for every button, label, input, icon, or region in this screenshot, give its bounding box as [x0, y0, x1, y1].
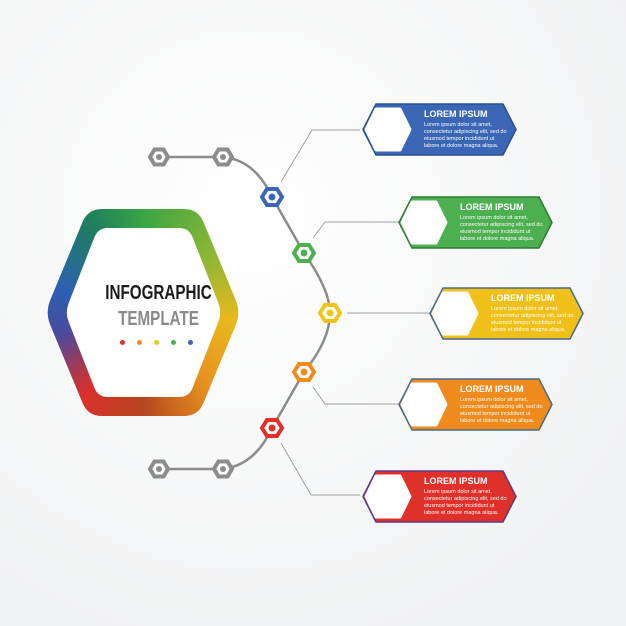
- card: orange: Lorem ipsum dolor sit amet, consectetur adipiscing elit, sed do eiusmod tempor incididunt ut labore et dolore magna aliqua.: [460, 397, 543, 424]
- card: blue: Lorem ipsum dolor sit amet, consectetur adipiscing elit, sed do eiusmod tempor incididunt ut labore et dolore magna aliqua.: [424, 122, 507, 149]
- colored dots: [120, 340, 193, 345]
- card: yellow: LOREM IPSUM: [491, 293, 555, 303]
- subtitle: TEMPLATE: [118, 308, 199, 330]
- card: green: LOREM IPSUM: [460, 202, 524, 212]
- card: orange: LOREM IPSUM: [460, 384, 524, 394]
- card: blue: LOREM IPSUM: [424, 109, 488, 119]
- colored nodes: [262, 189, 340, 436]
- card: red: [362, 470, 517, 523]
- central hexagon: [48, 209, 238, 416]
- card: blue: [362, 103, 517, 156]
- gray nodes: [150, 150, 232, 476]
- title: INFOGRAPHIC: [105, 282, 212, 304]
- card: green: Lorem ipsum dolor sit amet, consectetur adipiscing elit, sed do eiusmod tempor incididunt ut labore et dolore magna aliqua.: [460, 215, 543, 242]
- card: red: Lorem ipsum dolor sit amet, consectetur adipiscing elit, sed do eiusmod tempor incididunt ut labore et dolore magna aliqua.: [424, 489, 507, 516]
- card: orange: [398, 378, 553, 431]
- card: yellow: [429, 287, 584, 340]
- card: yellow: Lorem ipsum dolor sit amet, consectetur adipiscing elit, sed do eiusmod tempor incididunt ut labore et dolore magna aliqua.: [491, 306, 574, 333]
- card: green: [398, 196, 553, 249]
- card: red: LOREM IPSUM: [424, 476, 488, 486]
